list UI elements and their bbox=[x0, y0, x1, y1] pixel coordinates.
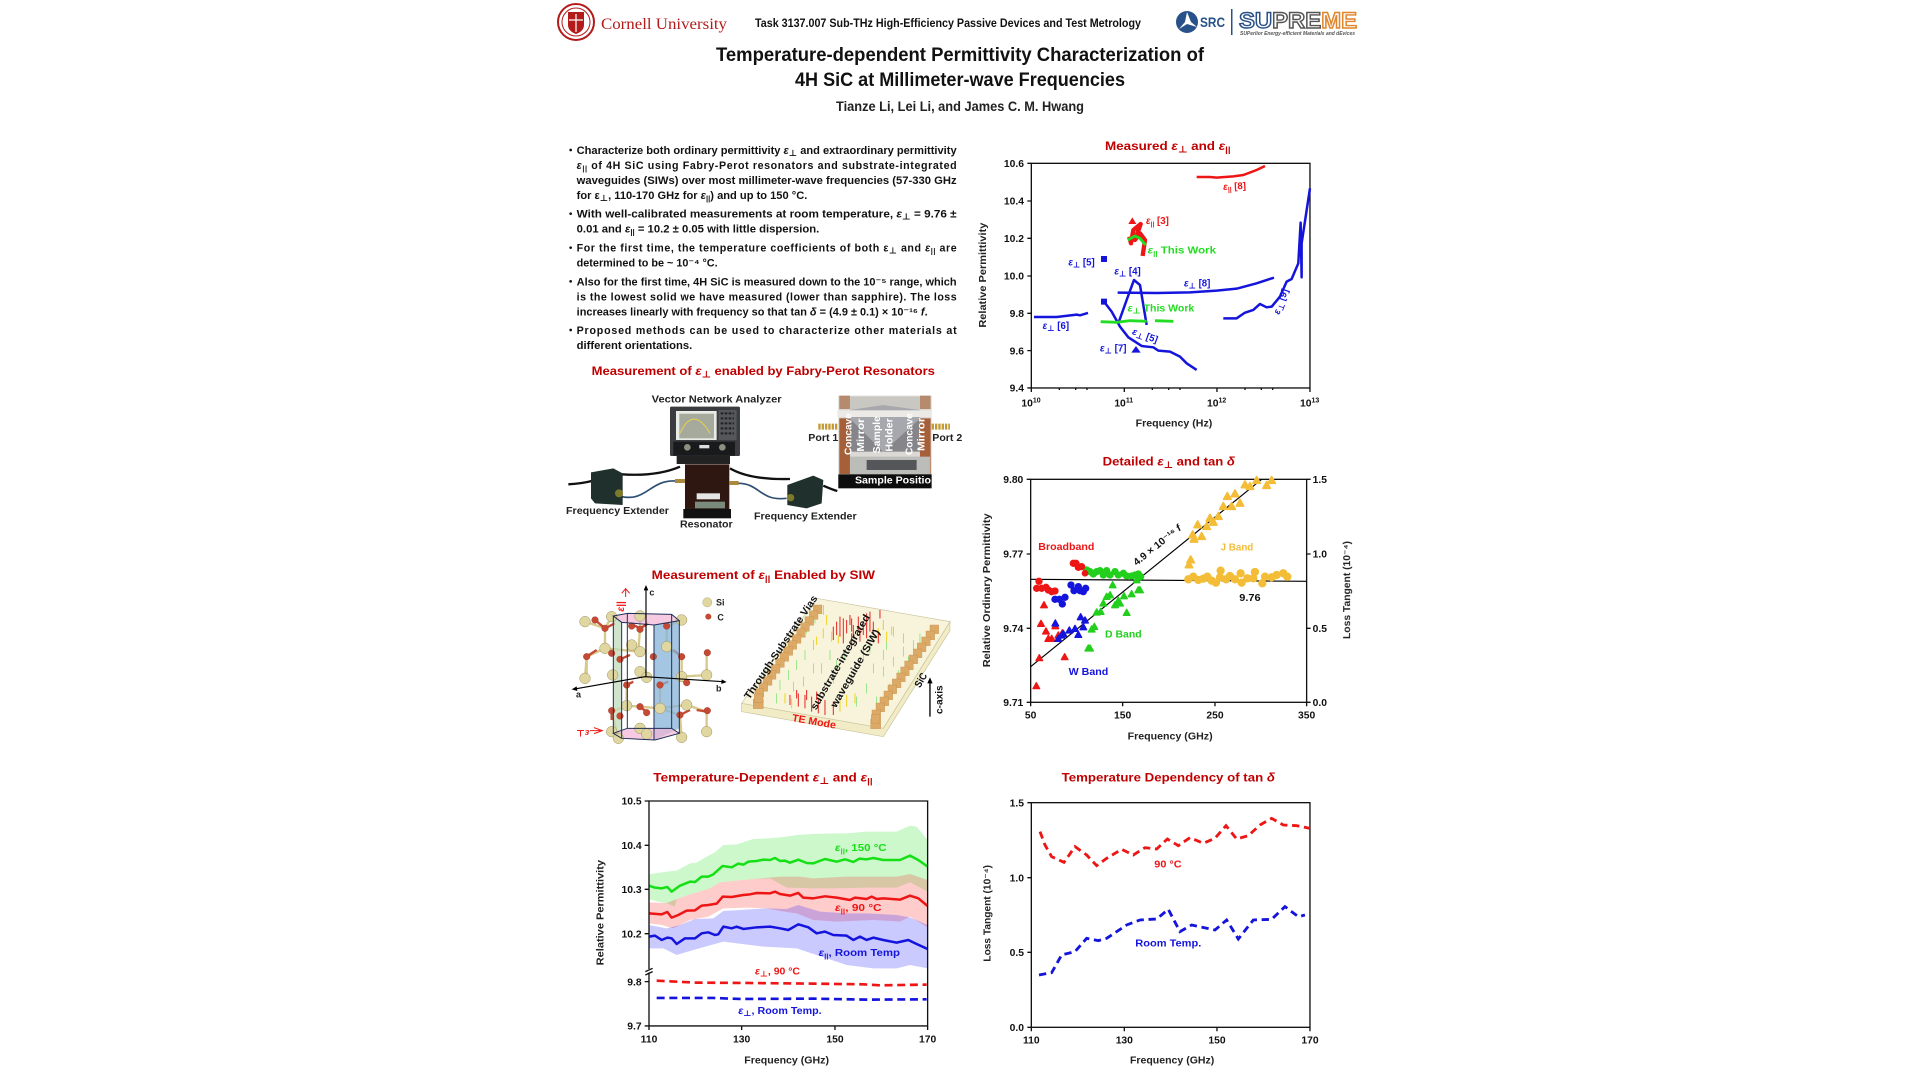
series labels: [8] bbox=[1231, 181, 1246, 193]
axes: 1.5 bbox=[1313, 475, 1327, 486]
icon: right frequency extender bbox=[787, 476, 823, 508]
axis and atom labels: Si bbox=[716, 597, 724, 607]
SIW labels: SiC bbox=[913, 671, 930, 690]
axes bbox=[595, 797, 937, 1066]
axes: 10 bbox=[1021, 399, 1033, 410]
axes: 10.3 bbox=[622, 885, 642, 896]
heading: measured: ⊥ bbox=[1178, 144, 1187, 154]
text block: key findings: different orientations. bbox=[577, 340, 692, 352]
task line: Task 3137.007 Sub-THz High-Efficiency Passive Devices and Test Metrology bbox=[755, 18, 1142, 30]
text block: key findings: Characterize both ordinary permittivity ε bbox=[577, 145, 789, 157]
labels: setup components: Port 1 bbox=[808, 433, 839, 444]
text block: key findings: ε bbox=[701, 190, 707, 202]
text block: key findings: || bbox=[931, 247, 935, 256]
chart labels: J Band bbox=[1221, 542, 1253, 553]
chart labels: 4.9 × 10⁻¹⁶ f bbox=[1132, 522, 1185, 568]
blue W band points bbox=[1052, 582, 1089, 641]
axes: 1.5 bbox=[1010, 798, 1024, 809]
SIW labels: Through-Substrate Vias bbox=[743, 594, 821, 702]
labels: setup components: Mirror bbox=[917, 417, 928, 451]
logo: SRC bbox=[1176, 9, 1232, 35]
axes bbox=[978, 159, 1319, 430]
red data series bbox=[1128, 166, 1265, 256]
heading: measured: || bbox=[1225, 144, 1231, 154]
logo: SUPREME: SUPREME bbox=[1239, 8, 1357, 33]
heading: Fabry-Perot: ⊥ bbox=[702, 369, 711, 379]
labels: setup components: Frequency Extender bbox=[566, 506, 669, 517]
text block: key findings: || bbox=[706, 194, 710, 203]
text block: key findings: = 9.76 ± bbox=[911, 209, 957, 221]
SIW labels: waveguide (SIW) bbox=[829, 628, 883, 711]
series labels: ε bbox=[755, 966, 760, 977]
axes: 10 bbox=[1033, 398, 1041, 405]
axes: 150 bbox=[1114, 710, 1132, 721]
cables bbox=[568, 467, 837, 491]
axes: 11 bbox=[1126, 398, 1133, 405]
axes: 0.0 bbox=[1313, 698, 1327, 709]
axis and atom labels: a bbox=[576, 689, 582, 699]
labels: setup components: Concave bbox=[844, 413, 855, 455]
logo: SUPREME: SUPerlior Energy-efficient Materials and dEvices bbox=[1240, 31, 1355, 37]
text block: key findings: ⊥ bbox=[902, 212, 911, 222]
panel: SIW measurement bbox=[572, 568, 950, 744]
series labels: , 90 °C bbox=[768, 966, 800, 977]
axes: 0.5 bbox=[1313, 624, 1327, 635]
text block: key findings: 0.01 and ε bbox=[577, 224, 630, 236]
labels: setup components bbox=[566, 395, 963, 531]
series labels: , Room Temp. bbox=[752, 1006, 822, 1017]
axes: 1.0 bbox=[1313, 550, 1327, 561]
heading: temperature-dependent: Temperature-Dependent ε bbox=[653, 771, 819, 785]
text block: key findings: ε bbox=[925, 243, 931, 255]
series labels: || bbox=[1153, 250, 1158, 257]
series labels: , Room Temp bbox=[829, 948, 900, 959]
heading: temperature-dependent: and bbox=[829, 771, 861, 785]
series labels: ⊥ bbox=[743, 1009, 752, 1018]
heading: tan delta: Temperature Dependency of tan δ bbox=[1062, 771, 1276, 785]
dashed perpendicular permittivity lines bbox=[657, 981, 927, 1000]
axes: 0.5 bbox=[1010, 948, 1024, 959]
axes: 10.6 bbox=[1004, 159, 1024, 170]
series labels: ⊥ bbox=[760, 969, 768, 978]
labels: setup components: Mirror bbox=[856, 418, 867, 452]
series labels bbox=[1135, 860, 1202, 949]
green D band points bbox=[1084, 567, 1144, 651]
axis and atom labels: C bbox=[717, 612, 724, 622]
axes: 9.80 bbox=[1003, 475, 1024, 486]
axis and atom labels bbox=[576, 587, 724, 699]
title bbox=[716, 45, 1205, 91]
series labels: ⊥ bbox=[1189, 282, 1196, 291]
chart labels: Broadband bbox=[1038, 542, 1094, 553]
series labels: || bbox=[1151, 221, 1154, 228]
blue data series bbox=[1034, 188, 1310, 370]
labels: setup components: Concave bbox=[904, 413, 915, 455]
axes: 350 bbox=[1298, 710, 1316, 721]
text block: key findings: and bbox=[897, 243, 925, 255]
axes: 50 bbox=[1025, 710, 1037, 721]
labels: setup components: Port 2 bbox=[932, 433, 963, 444]
heading: detailed: and tan bbox=[1173, 455, 1227, 469]
heading: detailed: δ bbox=[1227, 455, 1236, 469]
axes: Relative Permittivity bbox=[978, 222, 989, 328]
series labels: [5] bbox=[1080, 258, 1095, 269]
red axis labels bbox=[576, 589, 630, 738]
axis and atom labels: c bbox=[649, 587, 654, 597]
heading: temperature-dependent: || bbox=[867, 776, 873, 786]
text block: key findings: , 110-170 GHz for bbox=[608, 190, 701, 202]
axes: 10 bbox=[1300, 399, 1311, 410]
series labels: ε bbox=[1043, 321, 1048, 332]
text block: key findings: ⊥ bbox=[789, 148, 797, 158]
diagram: 4H SiC crystal bbox=[572, 585, 727, 744]
text block: key findings: ⊥ bbox=[889, 246, 897, 256]
series labels: , 150 °C bbox=[845, 843, 887, 854]
authors: Tianze Li, Lei Li, and James C. M. Hwang bbox=[836, 98, 1084, 114]
heading: temperature-dependent: ε bbox=[861, 771, 867, 785]
text block: key findings: are bbox=[936, 243, 957, 255]
heading: SIW: || bbox=[765, 573, 770, 583]
photo: resonator box bbox=[818, 396, 950, 488]
green data series bbox=[1101, 236, 1173, 322]
axes: 13 bbox=[1311, 398, 1319, 405]
icon: resonator bbox=[675, 464, 739, 518]
axes: Frequency (GHz) bbox=[1130, 1056, 1214, 1067]
axes: 130 bbox=[733, 1034, 751, 1045]
axes: 10.4 bbox=[1004, 197, 1024, 208]
axes: Loss Tangent (10⁻⁴) bbox=[983, 865, 994, 962]
text block: key findings: ε bbox=[577, 160, 583, 172]
title: 4H SiC at Millimeter-wave Frequencies bbox=[795, 70, 1125, 91]
heading: Fabry-Perot: Measurement of ε bbox=[592, 364, 701, 378]
axes: 130 bbox=[1116, 1036, 1133, 1047]
text block: key findings: ) and up to 150 °C. bbox=[710, 190, 807, 202]
red 90 C dashed series bbox=[1040, 818, 1310, 866]
series labels: ε bbox=[1131, 326, 1139, 339]
text block: key findings: and extraordinary permittivity bbox=[797, 145, 957, 157]
series labels: [7] bbox=[1112, 344, 1126, 355]
axes: 10 bbox=[1207, 399, 1218, 410]
text block: key findings bbox=[569, 145, 957, 352]
SIW labels: c-axis bbox=[935, 685, 946, 714]
axes: 12 bbox=[1218, 398, 1226, 405]
text block: key findings: || bbox=[630, 228, 635, 237]
axes: 10.4 bbox=[622, 841, 642, 852]
axes bbox=[983, 798, 1319, 1067]
axes: 9.7 bbox=[627, 1022, 642, 1033]
text block: key findings: determined to be ~ 10⁻⁴ °C. bbox=[577, 258, 718, 270]
text block: key findings: ⊥ bbox=[600, 193, 608, 203]
axes: 9.4 bbox=[1010, 384, 1024, 395]
header: Cornell University logo: Cornell University bbox=[601, 16, 727, 33]
text block: key findings: is the lowest solid we have measured (lower than sapphire). The loss bbox=[577, 291, 957, 303]
SIW labels: TE Mode bbox=[791, 713, 837, 732]
heading: SIW: Measurement of ε bbox=[652, 568, 764, 582]
SIW labels bbox=[743, 594, 946, 732]
title: Temperature-dependent Permittivity Characterization of bbox=[716, 45, 1205, 66]
shaded uncertainty bands bbox=[649, 826, 928, 968]
series labels: ⊥ bbox=[1119, 270, 1126, 279]
axes: Loss Tangent (10⁻⁴) bbox=[1342, 541, 1353, 639]
text block: key findings: With well-calibrated measurements at room temperature, ε bbox=[577, 209, 902, 221]
axes: 170 bbox=[919, 1034, 937, 1045]
labels: setup components: Frequency Extender bbox=[754, 511, 857, 522]
series labels: Room Temp. bbox=[1135, 938, 1202, 949]
series labels: ε bbox=[1184, 279, 1189, 290]
red axis labels: ε⊥ bbox=[576, 728, 589, 738]
panel: Temperature dependency of tan delta chart bbox=[983, 771, 1319, 1067]
series labels: 90 °C bbox=[1154, 860, 1182, 871]
axes: Relative Permittivity bbox=[595, 860, 606, 965]
heading: detailed: ⊥ bbox=[1164, 460, 1173, 470]
icon: left frequency extender bbox=[591, 468, 623, 505]
text block: key findings: || bbox=[582, 164, 587, 173]
icon: vector network analyzer bbox=[670, 407, 740, 464]
heading: detailed: Detailed ε bbox=[1103, 455, 1163, 469]
series labels: ⊥ bbox=[1276, 302, 1287, 312]
heading: measured: ε bbox=[1219, 139, 1225, 153]
header: Cornell University logo bbox=[558, 4, 727, 40]
series labels: This Work bbox=[1158, 245, 1217, 256]
faces of the unit cell bbox=[613, 616, 622, 738]
series labels: ε bbox=[835, 843, 841, 854]
axes: 9.71 bbox=[1003, 698, 1024, 709]
axes: 9.74 bbox=[1003, 624, 1024, 635]
text block: key findings: For the first time, the temperature coefficients of both ε bbox=[577, 243, 888, 255]
series labels: ε bbox=[1223, 182, 1228, 193]
series labels: ε bbox=[835, 903, 841, 914]
yellow J band points bbox=[1185, 477, 1291, 587]
panel: Detailed permittivity and loss tangent chart bbox=[982, 455, 1353, 742]
chart labels: 9.76 bbox=[1239, 593, 1261, 604]
series labels: || bbox=[840, 848, 845, 855]
axes: 10.0 bbox=[1004, 272, 1024, 283]
series labels: [6] bbox=[1055, 321, 1069, 332]
series labels bbox=[1043, 181, 1292, 356]
heading: measured: Measured ε bbox=[1105, 139, 1177, 153]
axes: 150 bbox=[1208, 1036, 1226, 1047]
axes: 10.2 bbox=[1004, 234, 1024, 245]
axes: 9.77 bbox=[1003, 550, 1024, 561]
labels: setup components: Vector Network Analyzer bbox=[652, 395, 782, 406]
series labels: [5] bbox=[1142, 331, 1159, 346]
heading: SIW: Enabled by SIW bbox=[770, 568, 876, 582]
series labels: [3] bbox=[1154, 216, 1169, 227]
text block: key findings: of 4H SiC using Fabry-Perot resonators and substrate-integrated bbox=[588, 160, 957, 172]
series labels: [4] bbox=[1126, 267, 1141, 278]
text block: key findings: Proposed methods can be used to characterize other materials at bbox=[577, 325, 957, 337]
series labels bbox=[738, 843, 900, 1018]
labels: setup components: Sample bbox=[872, 415, 883, 453]
axes: 250 bbox=[1206, 710, 1224, 721]
panel: Temperature-dependent permittivity chart bbox=[595, 771, 937, 1066]
chart labels: D Band bbox=[1105, 629, 1142, 640]
axes: 10.5 bbox=[622, 797, 642, 808]
axes: Frequency (Hz) bbox=[1136, 419, 1212, 430]
red axis labels: ε|| bbox=[616, 601, 627, 612]
labels: setup components: Sample Positio bbox=[855, 475, 931, 486]
coax cables bbox=[622, 481, 787, 499]
text block: key findings: waveguides (SIWs) over most millimeter-wave frequencies (57-330 GHz bbox=[576, 175, 957, 187]
series labels: ⊥ bbox=[1135, 331, 1145, 342]
field arrows bbox=[777, 605, 920, 715]
axes: 1.0 bbox=[1010, 873, 1024, 884]
SIW labels: substrate-integrated bbox=[809, 613, 873, 712]
logo: SRC: SRC bbox=[1200, 14, 1225, 30]
axis and atom labels: b bbox=[716, 684, 722, 694]
series labels: ⊥ bbox=[1133, 307, 1141, 316]
axes: 0.0 bbox=[1010, 1023, 1024, 1034]
labels: setup components: Holder bbox=[884, 418, 895, 452]
solid mean lines bbox=[649, 856, 928, 949]
heading: Fabry-Perot: enabled by Fabry-Perot Resonators bbox=[711, 364, 935, 378]
panel: Measured permittivity chart bbox=[978, 139, 1319, 430]
series labels: ⊥ bbox=[1105, 347, 1112, 356]
series labels: ⊥ bbox=[1073, 261, 1080, 270]
heading: measured: and bbox=[1187, 139, 1219, 153]
axes: 170 bbox=[1301, 1036, 1319, 1047]
text block: key findings: increases linearly with frequency so that tan δ = (4.9 ± 0.1) × 10⁻¹⁶ f. bbox=[577, 306, 928, 318]
axes: 10.2 bbox=[622, 929, 642, 940]
axes: Frequency (GHz) bbox=[744, 1055, 829, 1066]
chart labels: W Band bbox=[1069, 667, 1108, 678]
series labels: ε bbox=[1100, 344, 1105, 355]
diagram: substrate-integrated waveguide bbox=[742, 598, 950, 737]
series labels: ε bbox=[1128, 304, 1133, 315]
series labels: ε bbox=[1148, 245, 1154, 256]
series labels: , 90 °C bbox=[845, 903, 882, 914]
series labels: ε bbox=[738, 1006, 744, 1017]
axes: 10 bbox=[1114, 399, 1126, 410]
series labels: ε bbox=[1146, 216, 1151, 227]
series labels: ε bbox=[1272, 308, 1284, 316]
series labels: ε bbox=[1068, 258, 1073, 269]
series labels: || bbox=[841, 908, 845, 915]
heading: temperature-dependent: ⊥ bbox=[819, 776, 829, 786]
axes: 9.8 bbox=[1010, 309, 1024, 320]
series labels: ε bbox=[819, 948, 825, 959]
series labels: This Work bbox=[1141, 304, 1195, 315]
labels: setup components: Resonator bbox=[680, 520, 733, 531]
axes: 150 bbox=[826, 1034, 844, 1045]
text block: key findings: Also for the first time, 4H SiC is measured down to the 10⁻⁵ range, which bbox=[577, 276, 957, 288]
chart labels bbox=[1038, 522, 1261, 678]
series labels: [8] bbox=[1196, 279, 1210, 290]
axes: Frequency (GHz) bbox=[1128, 731, 1213, 742]
text block: key findings: = 10.2 ± 0.05 with little dispersion. bbox=[635, 224, 819, 236]
blue room temperature dashed series bbox=[1039, 907, 1305, 975]
series labels: ε bbox=[1114, 267, 1119, 278]
series labels: || bbox=[1228, 187, 1232, 194]
text block: key findings: for ε bbox=[577, 190, 599, 202]
panel: Fabry-Perot measurement bbox=[566, 364, 963, 531]
series labels: [9] bbox=[1276, 287, 1291, 305]
red broadband points bbox=[1033, 560, 1088, 689]
axes: 9.6 bbox=[1010, 346, 1024, 357]
series labels: || bbox=[824, 953, 829, 960]
axes: Relative Ordinary Permittivity bbox=[982, 513, 993, 667]
series labels: ⊥ bbox=[1047, 324, 1055, 333]
axes: 9.8 bbox=[627, 977, 642, 988]
axes: 110 bbox=[1023, 1036, 1040, 1047]
axes bbox=[982, 475, 1353, 742]
axes: 110 bbox=[641, 1034, 658, 1045]
reference lines bbox=[1031, 479, 1307, 667]
